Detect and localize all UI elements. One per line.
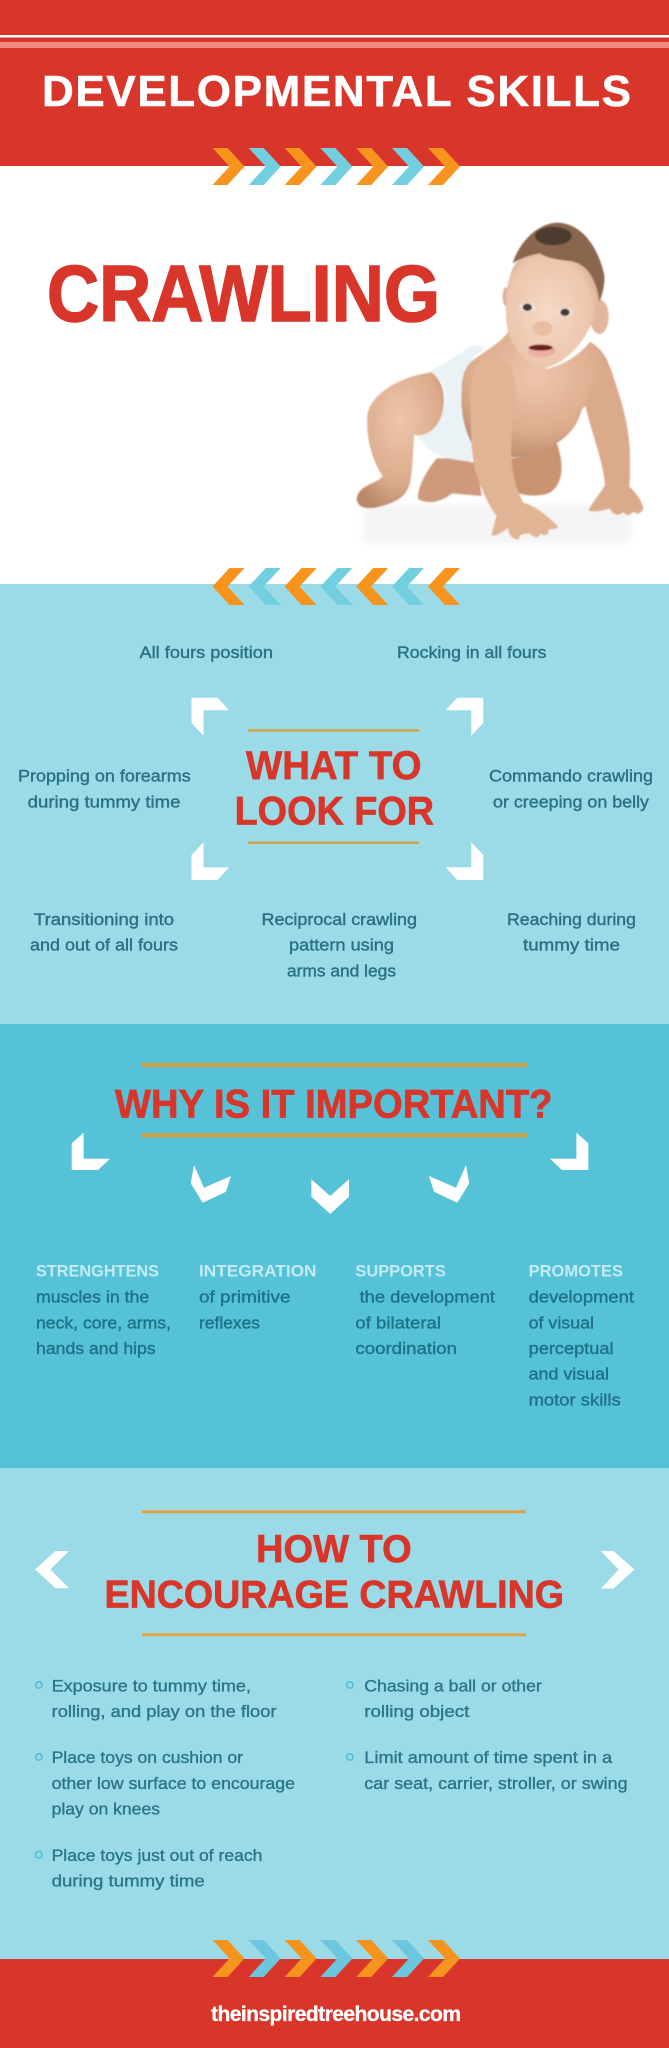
text: reciprocal crawling: Reciprocal crawling <box>262 910 417 929</box>
column: supports: coordination <box>355 1339 457 1358</box>
text: reaching during tummy time <box>507 910 636 955</box>
text: rocking in all fours: Rocking in all fours <box>397 643 546 662</box>
column: supports: the development <box>360 1288 495 1307</box>
panel: header banner <box>0 0 669 166</box>
text: transitioning: Transitioning into <box>34 910 174 929</box>
column: promotes: development <box>529 1288 634 1307</box>
list: right column: Chasing a ball or other <box>364 1676 542 1695</box>
text: reciprocal crawling <box>262 910 417 980</box>
panel: what to look for <box>0 568 669 1024</box>
column: integration <box>199 1262 316 1332</box>
illustration: crawling baby <box>357 223 643 543</box>
text: transitioning: and out of all fours <box>30 936 178 955</box>
heading: what to look for: LOOK FOR <box>235 789 434 833</box>
text: reciprocal crawling: pattern using <box>289 936 394 955</box>
list: left column <box>36 1676 295 1891</box>
text: reaching during tummy time: tummy time <box>523 936 620 955</box>
list: left column: Exposure to tummy time, <box>52 1676 251 1695</box>
column: strengthens <box>36 1262 171 1358</box>
column: supports: of bilateral <box>355 1313 441 1332</box>
text: commando crawling: or creeping on belly <box>493 792 650 811</box>
column: promotes: of visual <box>529 1313 594 1332</box>
arrows: fan of white chevrons <box>72 1133 588 1214</box>
text: propping on forearms: during tummy time <box>28 792 181 811</box>
column: supports: SUPPORTS <box>355 1262 446 1281</box>
panel: footer banner <box>0 1959 669 2048</box>
corner brackets around heading <box>192 698 483 880</box>
column: integration: INTEGRATION <box>199 1262 316 1281</box>
panel: how to encourage crawling <box>0 1468 669 1959</box>
heading: what to look for <box>235 744 434 833</box>
panel: why is it important <box>0 1024 669 1468</box>
list: left column: play on knees <box>52 1800 160 1819</box>
list: right column: rolling object <box>364 1702 470 1721</box>
column: promotes: and visual <box>529 1365 609 1384</box>
text: commando crawling: Commando crawling <box>489 767 653 786</box>
column: promotes: perceptual <box>529 1339 614 1358</box>
column: promotes: PROMOTES <box>529 1262 623 1281</box>
arrows: bottom chevron row <box>212 1940 460 1977</box>
list: left column: other low surface to encourage <box>52 1774 295 1793</box>
heading: crawling: CRAWLING <box>47 249 440 338</box>
arrow: left chevron <box>35 1551 69 1588</box>
heading: how to encourage crawling: ENCOURAGE CRAWLING <box>104 1573 564 1616</box>
column: strengthens: muscles in the <box>36 1288 149 1307</box>
list: right column: car seat, carrier, stroller, or swing <box>364 1774 628 1793</box>
text: propping on forearms <box>18 767 191 811</box>
arrows: reversed chevron row <box>212 568 460 605</box>
list: left column: Place toys just out of reach <box>52 1846 262 1865</box>
heading: developmental skills: DEVELOPMENTAL SKILLS <box>42 67 631 116</box>
text: commando crawling <box>489 767 653 811</box>
text: reaching during tummy time: Reaching during <box>507 910 636 929</box>
text: all fours position: All fours position <box>140 643 273 662</box>
list: left column: during tummy time <box>52 1872 205 1891</box>
list: left column: Place toys on cushion or <box>52 1748 243 1767</box>
column: strengthens: hands and hips <box>36 1339 156 1358</box>
heading: why is it important: WHY IS IT IMPORTANT? <box>115 1082 552 1126</box>
arrow: right chevron <box>601 1551 634 1589</box>
text: website: theinspiredtreehouse.com <box>211 2003 461 2026</box>
heading: how to encourage crawling <box>104 1528 564 1616</box>
list: left column: rolling, and play on the floor <box>52 1702 277 1721</box>
column: promotes: motor skills <box>529 1390 621 1409</box>
text: reciprocal crawling: arms and legs <box>287 961 396 980</box>
heading: how to encourage crawling: HOW TO <box>256 1528 412 1571</box>
text: transitioning <box>30 910 178 955</box>
list: right column <box>347 1676 628 1793</box>
text: propping on forearms: Propping on forearms <box>18 767 191 786</box>
column: promotes <box>529 1262 634 1409</box>
column: supports <box>355 1262 495 1358</box>
list: right column: Limit amount of time spent in a <box>364 1748 613 1767</box>
column: strengthens: neck, core, arms, <box>36 1313 171 1332</box>
heading: what to look for: WHAT TO <box>246 744 422 788</box>
column: integration: of primitive <box>199 1288 290 1307</box>
arrows: top chevron row <box>212 148 460 185</box>
column: strengthens: STRENGHTENS <box>36 1262 159 1281</box>
column: integration: reflexes <box>199 1313 260 1332</box>
